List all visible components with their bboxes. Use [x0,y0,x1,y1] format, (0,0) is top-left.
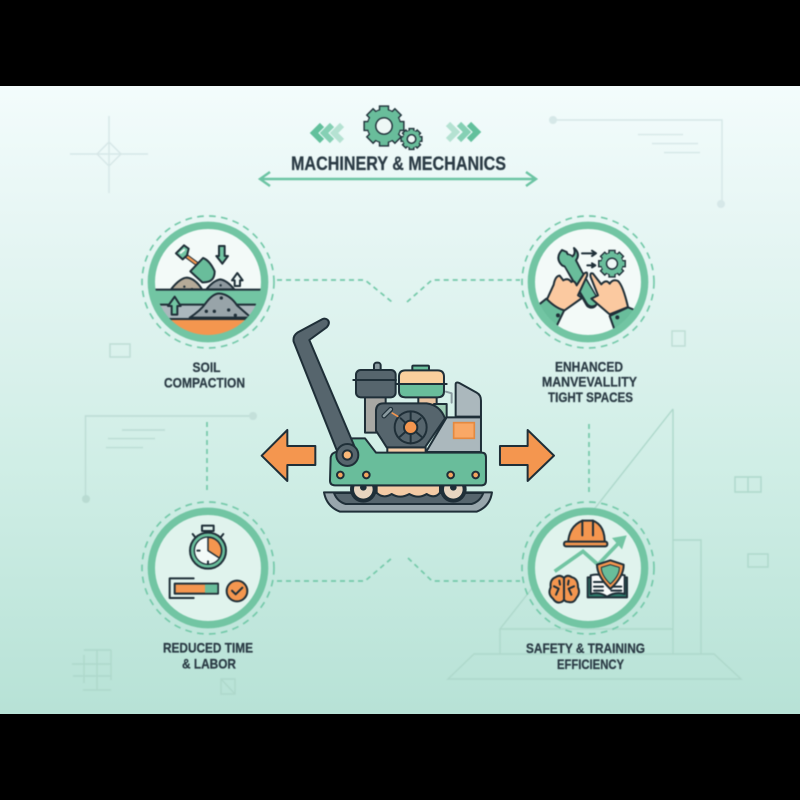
panel: safety and training [522,502,654,672]
base plate [324,492,492,512]
panel: enhanced maneuverability [522,216,654,405]
icon: wrench and hands [522,216,654,348]
label: TIGHT SPACES [548,389,633,405]
label: ENHANCED [555,358,623,374]
icon: large gear [364,106,404,146]
panel: soil compaction [142,216,274,390]
label [163,640,253,672]
green chassis [330,438,486,485]
background blueprint decorations [70,116,768,694]
double-headed arrow [260,172,536,186]
icon: left chevrons [314,125,342,141]
label: EFFICIENCY [557,656,625,672]
heading: MACHINERY & MECHANICS [291,153,506,175]
central machine: plate compactor [262,319,554,512]
panel: reduced time and labor [142,502,274,672]
label [526,640,645,672]
label: & LABOR [182,656,236,672]
label [542,358,638,405]
dashed connectors [207,280,589,581]
background panel [0,86,800,714]
wheels [350,476,377,503]
label: MANVEVALLITY [542,374,638,390]
label: REDUCED TIME [163,640,253,656]
icon: soil compaction [142,216,274,348]
roller peach segments [377,485,440,497]
icon: hard hat, chart, brain, book [522,502,654,634]
label: SOIL [192,359,221,375]
air filter [374,363,381,373]
fuel tank [412,366,429,372]
engine neck [365,396,386,433]
label [164,359,245,390]
icon: right chevrons [448,124,477,140]
icon: small gear [401,129,422,149]
label: COMPACTION [164,374,245,390]
label: SAFETY & TRAINING [526,640,645,656]
handle [293,319,356,452]
right cover [456,383,481,417]
arrow: left [262,430,315,481]
icon: stopwatch and progress [142,502,274,634]
title block [260,106,536,186]
engine housing [376,403,445,447]
peach base [387,447,426,453]
arrow: right [500,430,554,481]
